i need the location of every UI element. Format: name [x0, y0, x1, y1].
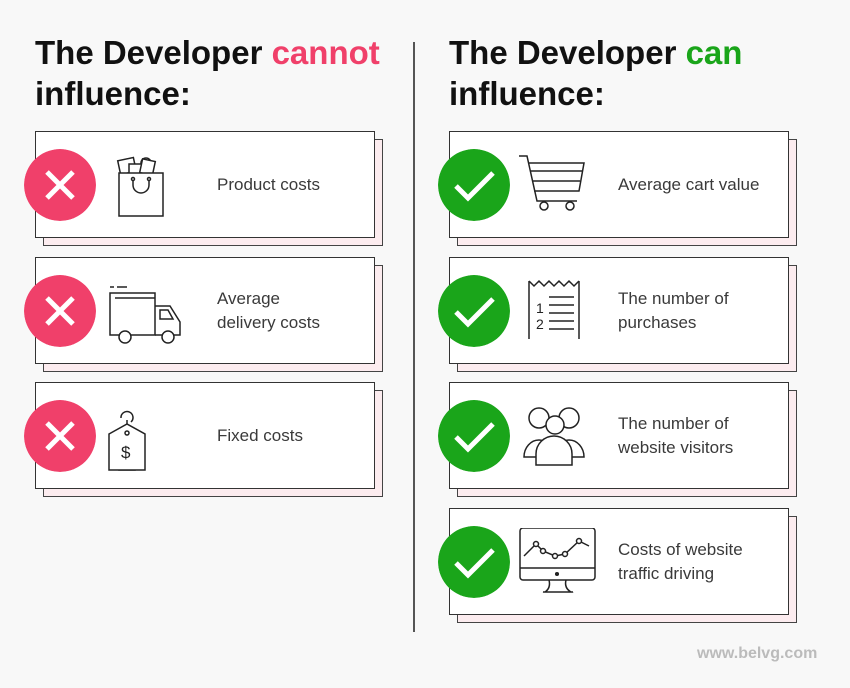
- title: cannot: influence:: [35, 75, 191, 112]
- label: Fixed costs: [217, 426, 303, 444]
- label: Average cart value: [618, 174, 759, 194]
- card: visitors: [438, 382, 797, 497]
- title: cannot: The Developer cannot: [35, 34, 380, 71]
- card: traffic: [438, 508, 797, 623]
- icon: check: [438, 149, 510, 221]
- icon: check: [438, 400, 510, 472]
- title: cannot: [35, 34, 380, 112]
- label: The number of: [618, 288, 729, 308]
- card: delivery: [24, 257, 383, 372]
- icon: cart: [519, 155, 585, 211]
- label: traffic driving: [618, 564, 714, 582]
- icon: x: [24, 400, 96, 472]
- icon: monitor: [519, 528, 596, 593]
- icon: receipt: 2: [536, 316, 544, 332]
- icon: truck: [109, 286, 181, 344]
- watermark: www.belvg.com: [697, 645, 817, 662]
- card: purchases: [438, 257, 797, 372]
- title: can: The Developer can: [449, 34, 742, 71]
- icon: x: [24, 275, 96, 347]
- label: website visitors: [618, 438, 733, 456]
- icon: x: [24, 149, 96, 221]
- icon: bag: [116, 156, 164, 217]
- label: Product costs: [217, 174, 320, 194]
- icon: check: [438, 275, 510, 347]
- icon: price tag: [108, 410, 146, 471]
- label: purchases: [618, 312, 696, 332]
- icon: check: [438, 526, 510, 598]
- divider: [413, 42, 414, 632]
- card: cart: [438, 131, 797, 246]
- icon: price tag: $: [121, 443, 131, 462]
- label: Average: [217, 288, 280, 308]
- title: can: [449, 34, 742, 112]
- label: delivery costs: [217, 312, 320, 332]
- icon: people: [523, 407, 585, 466]
- label: [217, 288, 320, 332]
- card: fixed: [24, 382, 383, 497]
- card: product costs: [24, 131, 383, 246]
- label: [618, 414, 733, 456]
- label: The number of: [618, 414, 729, 432]
- title: can: influence:: [449, 75, 605, 112]
- icon: receipt: [528, 280, 580, 339]
- icon: receipt: 1: [536, 300, 544, 316]
- label: Costs of website: [618, 540, 743, 558]
- label: [618, 540, 743, 582]
- label: [618, 288, 729, 332]
